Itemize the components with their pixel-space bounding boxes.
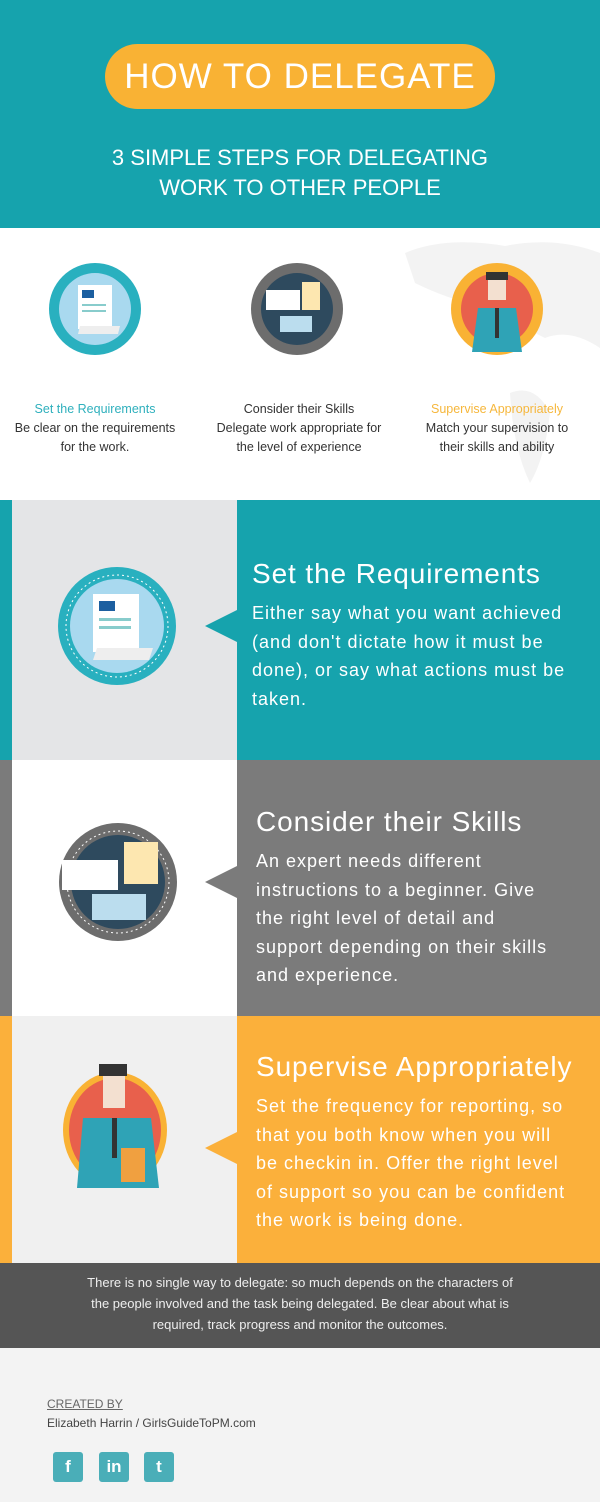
icon: twitter [144, 1452, 174, 1482]
title pill: HOW TO DELEGATE [124, 57, 476, 96]
icon: document [49, 263, 141, 355]
overview section [0, 228, 600, 500]
body text: instructions to a beginner. Give [256, 880, 535, 900]
body text: done), or say what actions must be [252, 660, 565, 680]
step 3 summary [426, 402, 568, 454]
body text: support depending on their skills [256, 936, 547, 956]
step 1 summary [15, 402, 175, 454]
panel: consider their skills [0, 760, 600, 1016]
step 3 summary: their skills and ability [440, 440, 554, 454]
body text: taken. [252, 688, 307, 708]
panel: set the requirements [0, 500, 600, 760]
subtitle: 3 SIMPLE STEPS FOR DELEGATING [112, 145, 488, 170]
body text [252, 603, 565, 708]
icon: document large [58, 567, 176, 685]
icon: charts large [59, 823, 177, 941]
credits: CREATED BY [47, 1397, 123, 1411]
icon: linkedin: in [106, 1457, 122, 1476]
body text: of support so you can be confident [256, 1182, 565, 1202]
icon: person [451, 263, 543, 355]
subtitle [112, 145, 488, 200]
step 1 summary: for the work. [61, 440, 129, 454]
header [0, 0, 600, 228]
footer [0, 1348, 600, 1502]
heading: Supervise Appropriately [256, 1051, 572, 1082]
icon: facebook [53, 1452, 83, 1482]
step 1 summary: Be clear on the requirements [15, 421, 175, 435]
step 2 summary: Consider their Skills [244, 402, 354, 416]
icon: charts [251, 263, 343, 355]
title pill [105, 44, 495, 109]
step 3 summary: Match your supervision to [426, 421, 568, 435]
body text: Set the frequency for reporting, so [256, 1096, 563, 1116]
map decoration [405, 242, 600, 482]
body text: (and don't dictate how it must be [252, 632, 544, 652]
body text: An expert needs different [256, 851, 482, 871]
icon: facebook: f [65, 1457, 71, 1476]
panel: supervise appropriately [0, 1016, 600, 1263]
body text: the work is being done. [256, 1210, 464, 1230]
arrow [205, 866, 237, 898]
step 2 summary [217, 402, 382, 454]
arrow [205, 610, 237, 642]
subtitle: WORK TO OTHER PEOPLE [159, 175, 441, 200]
icon: linkedin [99, 1452, 129, 1482]
arrow [205, 1132, 237, 1164]
body text [256, 851, 547, 985]
icon: twitter: t [156, 1457, 162, 1476]
conclusion band [0, 1263, 600, 1348]
body text: that you both know when you will [256, 1124, 551, 1144]
body text [256, 1096, 565, 1230]
credits [47, 1397, 256, 1430]
step 3 summary: Supervise Appropriately [431, 402, 563, 416]
icon: person large [63, 1064, 167, 1188]
credits: Elizabeth Harrin / GirlsGuideToPM.com [47, 1416, 256, 1430]
body text: and experience. [256, 965, 399, 985]
conclusion band: required, track progress and monitor the outcomes. [153, 1317, 447, 1332]
step 1 summary: Set the Requirements [35, 402, 155, 416]
conclusion band: There is no single way to delegate: so much depends on the characters of [87, 1275, 513, 1290]
body text: the right level of detail and [256, 908, 495, 928]
step 2 summary: the level of experience [236, 440, 362, 454]
heading: Consider their Skills [256, 806, 522, 837]
body text: Either say what you want achieved [252, 603, 562, 623]
conclusion band: the people involved and the task being delegated. Be clear about what is [91, 1296, 509, 1311]
step 2 summary: Delegate work appropriate for [217, 421, 381, 435]
body text: be checkin in. Offer the right level [256, 1153, 559, 1173]
heading: Set the Requirements [252, 558, 541, 589]
